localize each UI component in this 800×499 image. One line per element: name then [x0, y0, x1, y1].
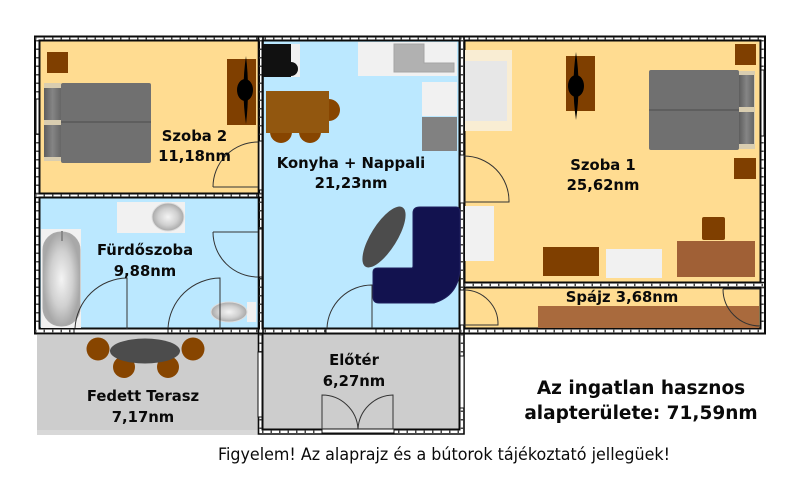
furniture: bathroom sink [117, 202, 185, 233]
label: Előtér: 6,27nm [323, 373, 385, 390]
room: Fürdőszoba floor [39, 197, 259, 329]
room: Szoba 1 floor [464, 40, 761, 283]
furniture: Szoba 2 bed [44, 83, 151, 163]
furniture: stove [422, 117, 457, 151]
furniture: terrace table and chairs [86, 338, 204, 378]
furniture: coffee table [354, 200, 414, 274]
furniture: dresser [543, 247, 599, 276]
label: Fürdőszoba: Fürdőszoba [97, 242, 193, 259]
label: Szoba 1: 25,62nm [567, 177, 639, 194]
door swings [75, 142, 760, 429]
total area callout: Az ingatlan hasznos [537, 378, 745, 399]
label: Szoba 2: 11,18nm [158, 148, 231, 165]
furniture: nightstand bottom [734, 158, 756, 179]
label: Konyha + Nappali: 21,23nm [315, 175, 387, 192]
label: Spájz: Spájz 3,68nm [566, 289, 678, 306]
furniture: dining table with chairs [266, 91, 340, 143]
furniture: bathtub [41, 229, 81, 328]
room: Spájz floor [464, 287, 761, 329]
windows and door openings [36, 70, 764, 433]
furniture: pantry shelf [538, 306, 759, 328]
furniture: Szoba 2 nightstand [47, 52, 68, 73]
room: Előtér floor [262, 334, 460, 430]
label: Szoba 1: Szoba 1 [570, 157, 636, 174]
furniture: white cabinet [606, 249, 662, 278]
furniture: Szoba 1 sofa [465, 50, 512, 131]
room: Fedett Terasz floor [37, 335, 258, 435]
furniture: Szoba 1 bed [649, 70, 755, 150]
total area callout: alapterülete: 71,59nm [524, 403, 758, 424]
disclaimer: Figyelem! Az alaprajz és a bútorok tájékoztató jellegüek! [218, 445, 670, 465]
label: Előtér: Előtér [329, 352, 380, 369]
walls [35, 36, 765, 434]
label: Fedett Terasz: 7,17nm [112, 409, 174, 426]
label: Konyha + Nappali: Konyha + Nappali [277, 155, 425, 172]
furniture: kitchen counter [358, 42, 457, 76]
furniture: Szoba 1 TV stand [566, 52, 595, 120]
label: Fedett Terasz: Fedett Terasz [87, 388, 199, 405]
furniture: Szoba 2 TV stand [227, 56, 256, 125]
furniture: toilet [211, 302, 256, 322]
room: Konyha + Nappali floor [262, 40, 460, 329]
room: Szoba 2 floor [39, 40, 259, 194]
furniture: chair [702, 217, 725, 240]
furniture: desk [677, 241, 755, 277]
furniture: fridge counter [422, 82, 457, 116]
furniture: black appliance in kitchen [263, 44, 300, 77]
label: Szoba 2: Szoba 2 [162, 128, 227, 145]
furniture: nightstand top [735, 44, 756, 65]
furniture: corner sofa [373, 207, 460, 303]
furniture: white cabinet left [465, 206, 494, 261]
label: Fürdőszoba: 9,88nm [114, 263, 176, 280]
